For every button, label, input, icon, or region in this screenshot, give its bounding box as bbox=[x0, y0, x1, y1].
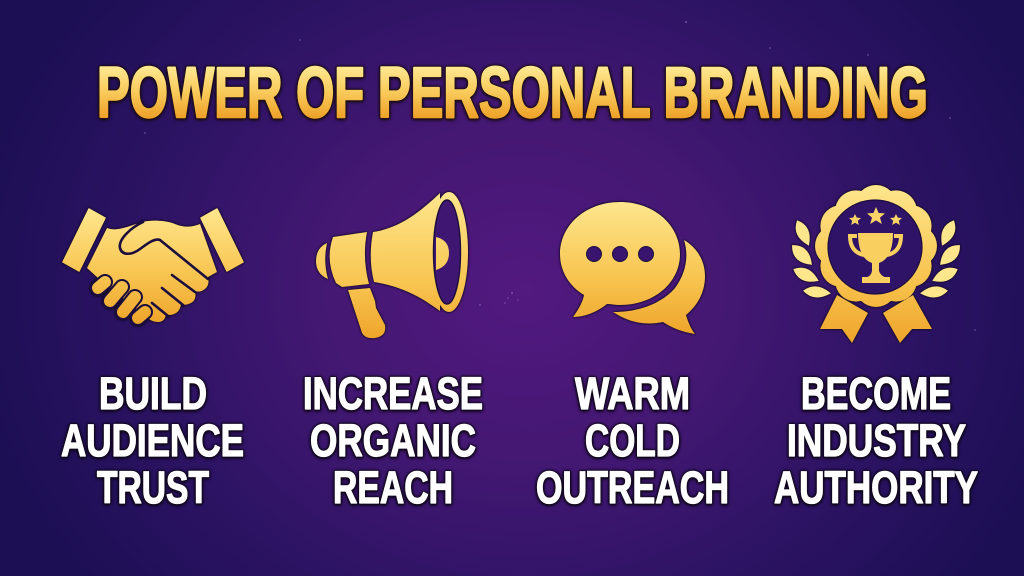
label: warm cold outreach: OUTREACH bbox=[536, 462, 729, 513]
label: build audience trust: BUILD bbox=[99, 368, 207, 419]
icon: chat bubbles bbox=[560, 202, 705, 334]
icon: handshake bbox=[63, 209, 243, 322]
icon: award badge with trophy bbox=[788, 185, 964, 343]
label: build audience trust: AUDIENCE bbox=[61, 415, 244, 466]
label: warm cold outreach: WARM bbox=[575, 368, 690, 419]
label: build audience trust: TRUST bbox=[97, 462, 209, 513]
label: increase organic reach bbox=[303, 368, 483, 513]
label: warm cold outreach bbox=[536, 368, 729, 513]
label: increase organic reach: REACH bbox=[333, 462, 453, 513]
label: become industry authority: INDUSTRY bbox=[787, 415, 966, 466]
label: increase organic reach: INCREASE bbox=[303, 368, 483, 419]
label: become industry authority bbox=[774, 368, 978, 513]
label: become industry authority: BECOME bbox=[801, 368, 951, 419]
label: increase organic reach: ORGANIC bbox=[310, 415, 476, 466]
icon: megaphone bbox=[316, 192, 468, 338]
label: warm cold outreach: COLD bbox=[585, 415, 680, 466]
label: build audience trust bbox=[61, 368, 244, 513]
background specks bbox=[144, 21, 976, 331]
